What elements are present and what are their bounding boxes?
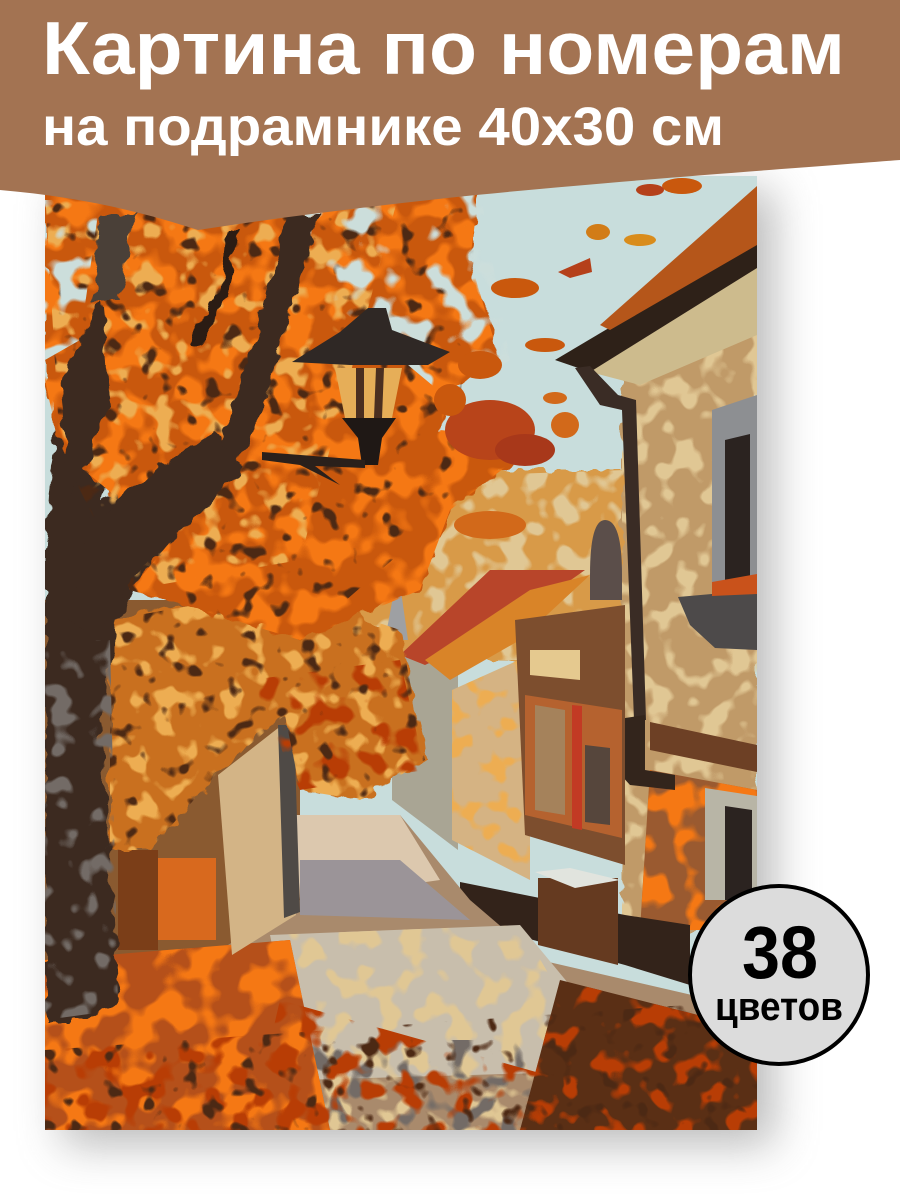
upper foliage <box>45 185 540 640</box>
red roof <box>400 570 585 665</box>
upper window <box>712 395 757 590</box>
header banner <box>0 0 900 230</box>
badge: 38 colours <box>690 886 868 1064</box>
far grey house <box>392 650 458 850</box>
tree trunk <box>45 430 180 1024</box>
street lantern <box>262 308 450 485</box>
scattered leaves <box>434 178 702 539</box>
bay window <box>525 695 622 838</box>
street <box>45 815 757 1130</box>
wall lamp <box>625 715 675 790</box>
orange roof <box>425 575 590 680</box>
orange box <box>158 858 216 940</box>
roof <box>555 240 757 372</box>
warm backing behind lower tree <box>45 600 300 1000</box>
badge number: 38 <box>742 911 818 994</box>
sky <box>45 176 757 994</box>
subtitle: на подрамнике 40х30 см <box>42 97 724 157</box>
cream facade <box>452 655 530 880</box>
lower window <box>705 788 757 900</box>
painting: autumn street <box>45 176 757 1130</box>
brown house <box>515 605 625 865</box>
canvas drop shadow <box>62 190 774 1145</box>
lower foliage <box>110 590 425 850</box>
planter <box>678 590 757 650</box>
right building <box>555 186 757 930</box>
gutter <box>575 366 646 720</box>
hill texture <box>340 470 625 660</box>
stone post <box>538 878 618 965</box>
trunk texture <box>45 640 118 1020</box>
trunk branches over foliage <box>60 212 322 584</box>
middle houses <box>385 520 690 985</box>
ledge <box>650 722 757 772</box>
left wall and gate <box>118 725 300 955</box>
title: Картина по номерам <box>42 6 845 90</box>
distant hills <box>359 467 625 662</box>
badge label: цветов <box>715 985 843 1029</box>
fence <box>460 882 690 985</box>
arch window <box>590 520 622 600</box>
